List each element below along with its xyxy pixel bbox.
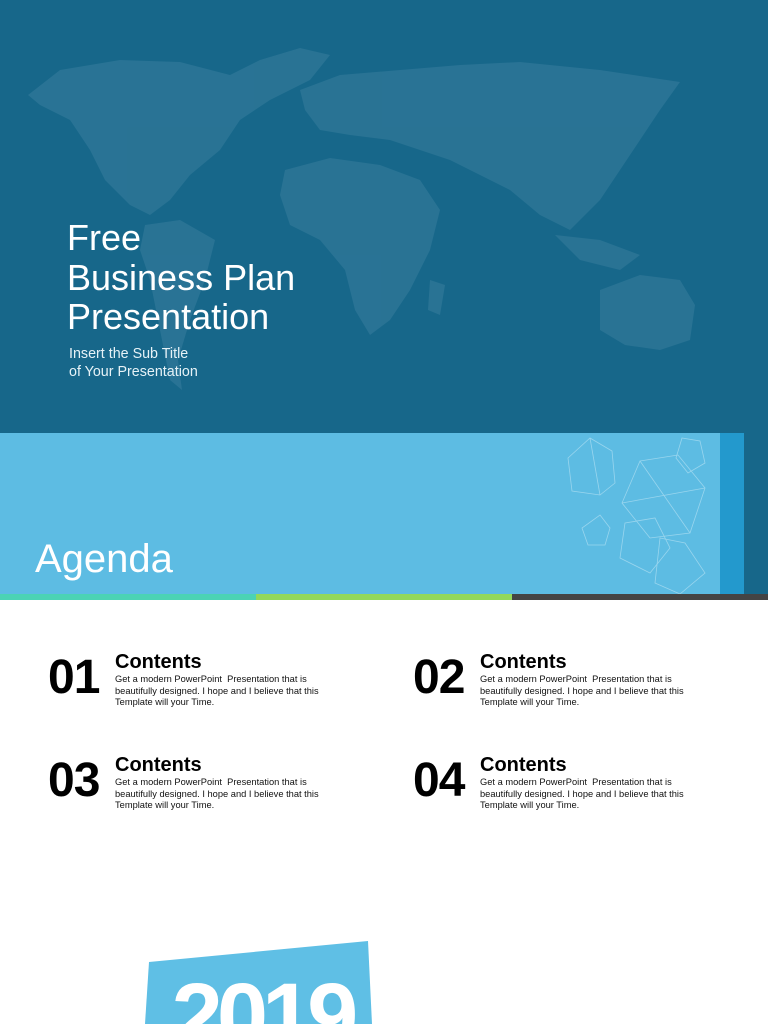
- title: Presentation: [67, 296, 269, 337]
- decorative polygons: [568, 438, 706, 594]
- item 01: Get a modern PowerPoint Presentation that is beautifully designed. I hope and I believe that this Template will your Time.: [115, 674, 319, 707]
- title: Free: [67, 217, 141, 258]
- item 04: Contents: [480, 754, 567, 776]
- subtitle: of Your Presentation: [69, 364, 198, 380]
- item 02: [413, 651, 684, 707]
- heading: Agenda: Agenda: [35, 537, 173, 581]
- item 02: Get a modern PowerPoint Presentation that is beautifully designed. I hope and I believe that this Template will your Time.: [480, 674, 684, 707]
- subtitle: Insert the Sub Title: [69, 346, 188, 362]
- 2019 badge: [145, 941, 372, 1024]
- agenda band: [0, 433, 744, 594]
- world map: [28, 48, 695, 390]
- item 03: [48, 754, 319, 810]
- item 03: Contents: [115, 754, 202, 776]
- item 01: Contents: [115, 651, 202, 673]
- right dark strip: [744, 433, 768, 594]
- item 01: 01: [48, 651, 99, 704]
- hero panel: [0, 0, 768, 433]
- color bars: [0, 594, 768, 600]
- item 02: Contents: [480, 651, 567, 673]
- item 02: 02: [413, 651, 464, 704]
- title: Business Plan: [67, 256, 295, 298]
- accent strip: [720, 433, 744, 594]
- item 04: Get a modern PowerPoint Presentation that is beautifully designed. I hope and I believe that this Template will your Time.: [480, 777, 684, 810]
- title: [67, 217, 295, 337]
- subtitle: [69, 346, 198, 380]
- item 04: [413, 754, 684, 810]
- item 04: 04: [413, 754, 464, 807]
- item 03: Get a modern PowerPoint Presentation that is beautifully designed. I hope and I believe that this Template will your Time.: [115, 777, 319, 810]
- item 03: 03: [48, 754, 99, 807]
- item 01: [48, 651, 319, 707]
